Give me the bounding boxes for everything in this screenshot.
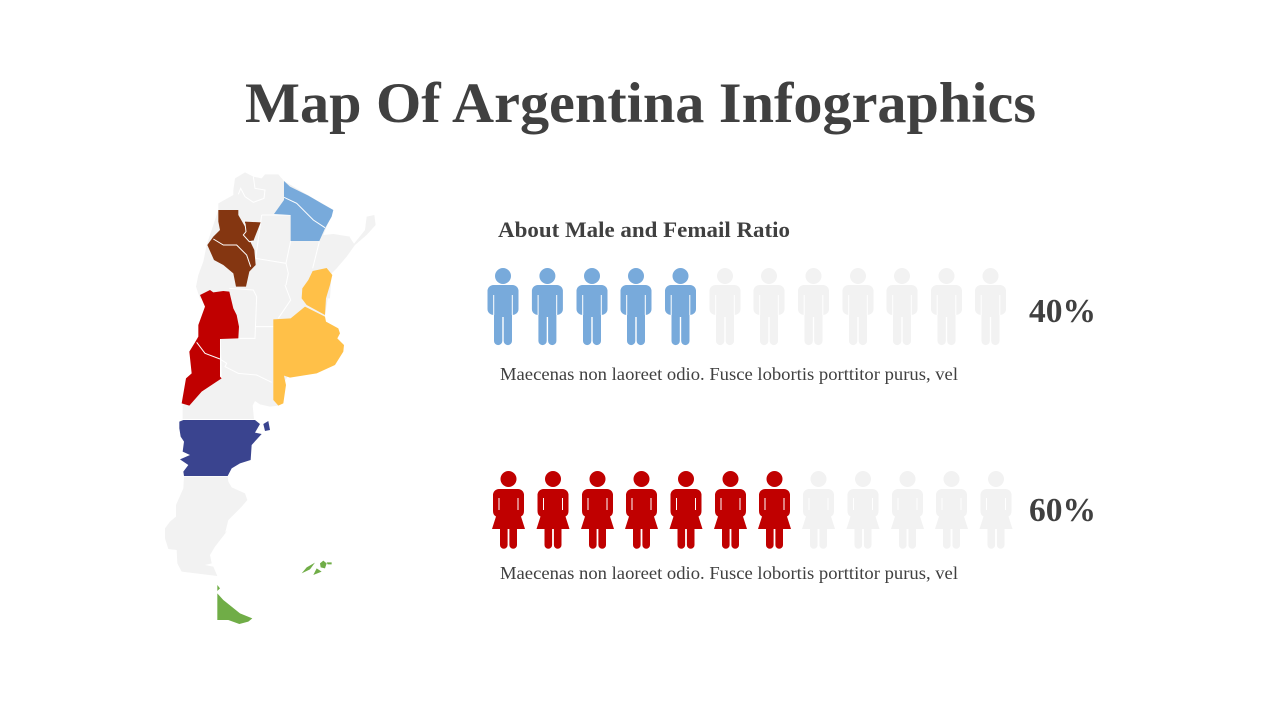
pictogram: male 40 percent bbox=[487, 268, 1006, 345]
value: male percent: 40% bbox=[1029, 293, 1096, 330]
region: north-west, brown bbox=[207, 210, 261, 287]
pictogram: female 60 percent bbox=[492, 471, 1012, 549]
map: central provinces base bbox=[183, 285, 330, 419]
region: southern Patagonia, grey bbox=[165, 477, 247, 576]
panel: gender ratio bbox=[487, 217, 1096, 583]
text: male description: Maecenas non laoreet odio. Fusce lobortis porttitor purus, vel bbox=[500, 364, 958, 384]
map of Argentina bbox=[165, 172, 376, 624]
region: central Patagonia, navy bbox=[179, 420, 270, 476]
region: Pampas, yellow bbox=[273, 268, 344, 406]
map: northern provinces base bbox=[196, 172, 376, 298]
heading: About Male and Femail Ratio bbox=[498, 217, 790, 242]
region: north-east, blue bbox=[274, 181, 333, 241]
title: Map Of Argentina Infographics bbox=[245, 72, 1036, 135]
region: Tierra del Fuego and islands, green bbox=[217, 561, 332, 624]
value: female percent: 60% bbox=[1029, 492, 1096, 529]
region: Cuyo, red bbox=[182, 290, 239, 406]
text: female description: Maecenas non laoreet odio. Fusce lobortis porttitor purus, vel bbox=[500, 563, 958, 583]
